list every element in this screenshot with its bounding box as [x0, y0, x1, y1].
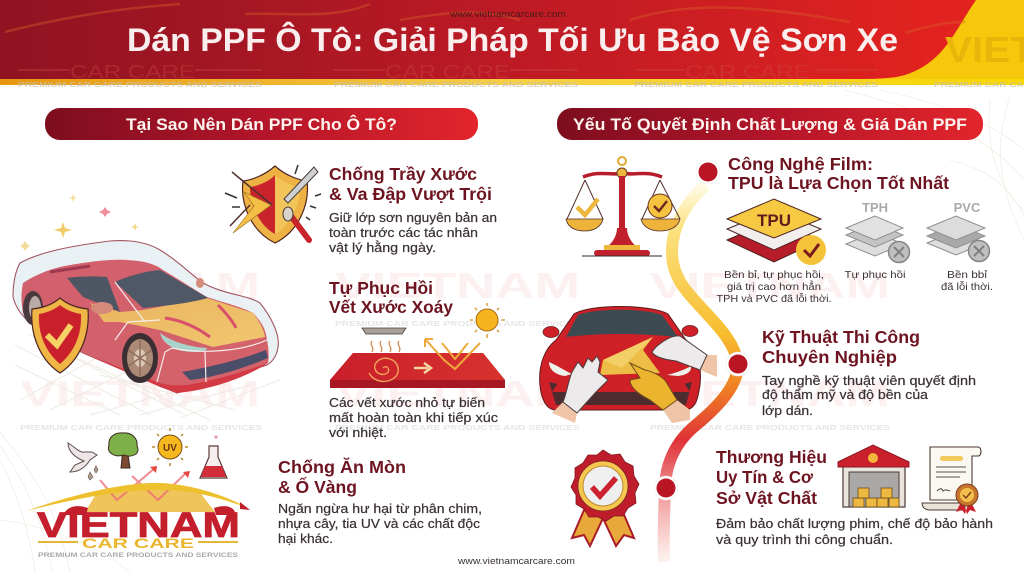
text: brand description	[716, 517, 993, 547]
watermark: car care row: CAR CARE	[70, 62, 195, 82]
heading: left section: Tại Sao Nên Dán PPF Cho Ô Tô?	[126, 115, 397, 134]
text: self healing body	[329, 396, 498, 440]
logo: Vietnam Car Care: CAR CARE	[82, 535, 194, 551]
text: corrosion resistance: hại khác.	[278, 532, 333, 546]
headlights	[549, 362, 572, 376]
yellow glove	[663, 400, 690, 423]
mirror	[91, 302, 113, 314]
logo: Vietnam Car Care	[26, 466, 250, 559]
watermark pattern: PREMIUM CAR CARE PRODUCTS AND SERVICES	[650, 425, 890, 432]
text: installation technique: lớp dán.	[762, 404, 813, 418]
text: corrosion resistance	[278, 456, 482, 546]
timeline path	[664, 185, 738, 562]
text: scratch resistance: Giữ lớp sơn nguyên bản an	[329, 211, 497, 225]
illustration: car under protective film	[13, 241, 280, 420]
icon: PVC film stack: đã lỗi thời.	[941, 280, 993, 293]
premium watermark line	[18, 82, 1024, 89]
text: self healing heading	[329, 278, 453, 317]
title: Dán PPF Ô Tô: Giải Pháp Tối Ưu Bảo Vệ Sơn Xe	[127, 22, 898, 58]
icon: scratch-resistant shield	[225, 165, 321, 243]
text: film technology heading: TPU là Lựa Chọn Tốt Nhất	[728, 173, 949, 193]
text: corrosion resistance: Ngăn ngừa hư hại từ phân chim,	[278, 502, 482, 516]
body lines	[115, 282, 267, 382]
body	[540, 306, 700, 410]
text: TPU description: Bền bỉ, tự phục hồi,	[724, 269, 824, 281]
watermark: corner VIETNAM: VIET	[945, 29, 1024, 70]
icon: TPH film stack: TPH	[862, 200, 888, 215]
text: self healing body: với nhiệt.	[329, 426, 387, 440]
text: installation technique: Tay nghề kỹ thuật viên quyết định	[762, 374, 976, 388]
heading: right section	[557, 108, 983, 140]
film bubble	[13, 241, 278, 393]
text: scratch resistance	[329, 164, 497, 255]
icon: warehouse	[838, 445, 909, 507]
text: corrosion resistance: nhựa cây, tia UV và các chất độc	[278, 517, 480, 531]
text: TPU description: TPH và PVC đã lỗi thời.	[716, 292, 832, 305]
rear wheel	[23, 291, 43, 325]
header banner	[0, 0, 1024, 85]
icons: corrosion agents: UV	[163, 443, 177, 454]
icon: certificate	[922, 447, 981, 514]
text: scratch resistance: & Va Đập Vượt Trội	[329, 184, 492, 204]
premium watermark line: PREMIUM CAR CARE PRODUCTS AND SERVICES	[634, 82, 878, 89]
heading: left section	[45, 108, 478, 140]
mirrors	[543, 326, 559, 338]
top website: www.vietnamcarcare.com	[449, 9, 566, 20]
icon: PVC film stack: PVC	[954, 200, 981, 215]
premium watermark line: PREMIUM CAR CARE PRODUCTS AND SERVICES	[18, 82, 262, 89]
text: TPU description: giá trị cao hơn hẳn	[727, 280, 821, 293]
flask	[200, 446, 227, 478]
watermark pattern: PREMIUM CAR CARE PRODUCTS AND SERVICES	[20, 425, 262, 432]
windshield	[115, 270, 208, 308]
text: TPU description	[716, 269, 832, 305]
text: corrosion resistance: Chống Ăn Mòn	[278, 456, 406, 477]
headlight	[160, 333, 207, 352]
text: self healing body: mất hoàn toàn khi tiếp xúc	[329, 411, 498, 425]
timeline dots	[654, 160, 750, 500]
tree	[121, 448, 130, 468]
heading: right section: Yếu Tố Quyết Định Chất Lượng & Giá Dán PPF	[573, 115, 967, 134]
hood and door highlight	[90, 298, 265, 347]
watermark: car care row: CAR CARE	[385, 62, 510, 82]
premium watermark line: PREMIUM CAR CARE PRODUCTS AND SERVICES	[334, 82, 578, 89]
sparkles	[20, 194, 139, 251]
ground grid	[15, 335, 280, 420]
watermark: car care row	[18, 62, 878, 82]
icon: TPU film stack: TPU	[757, 211, 791, 230]
text: scratch resistance: toàn trước các tác nhân	[329, 226, 478, 240]
dove	[68, 443, 97, 472]
car body	[22, 260, 269, 385]
watermark pattern: PREMIUM CAR CARE PRODUCTS AND SERVICES	[335, 321, 580, 328]
icons: corrosion agents	[68, 428, 227, 480]
text: brand heading: Uy Tín & Cơ	[716, 467, 814, 487]
text: installation technique: Kỹ Thuật Thi Công	[762, 327, 920, 347]
text: scratch resistance: vật lý hằng ngày.	[329, 240, 436, 255]
droppings	[88, 466, 98, 480]
text: film technology heading: Công Nghệ Film:	[728, 154, 873, 174]
logo: Vietnam Car Care: PREMIUM CAR CARE PRODUCTS AND SERVICES	[38, 552, 239, 559]
text: self healing heading: Vết Xước Xoáy	[329, 297, 453, 317]
side window	[67, 276, 120, 312]
watermark pattern: VIETNAM	[335, 265, 580, 306]
icon: award ribbon	[571, 450, 639, 546]
icon: TPH film stack: Tự phục hồi	[844, 269, 906, 281]
text: installation technique: Chuyên Nghiệp	[762, 347, 897, 367]
icon: balance scales	[566, 157, 680, 256]
text: brand description: Đảm bảo chất lượng phim, chế độ bảo hành	[716, 517, 993, 531]
premium watermark line: PREMIUM CAR CA	[934, 82, 1024, 89]
windshield	[566, 310, 678, 337]
watermark pattern: VIETNAM	[335, 373, 580, 414]
footer website: www.vietnamcarcare.com	[457, 556, 575, 567]
shield badge	[32, 298, 88, 373]
logo: Vietnam Car Care: VIETNAM	[37, 506, 240, 545]
icon: TPU film stack	[727, 199, 826, 265]
watermark pattern: VIETNAM	[650, 265, 890, 306]
text: film technology heading	[728, 154, 949, 193]
watermark pattern: PREMIUM CAR CARE PRODUCTS AND SERVICES	[335, 425, 580, 432]
icon: TPH film stack	[844, 200, 910, 281]
watermark: car care row: CAR CARE	[685, 62, 810, 82]
text: installation technique: độ thẩm mỹ và độ bền của	[762, 388, 928, 402]
watermark pattern: VIETNAM	[650, 373, 890, 414]
UV sun	[158, 435, 182, 459]
text: installation technique	[762, 327, 976, 418]
watermark pattern: VIETNAM	[20, 265, 260, 306]
grille	[182, 350, 268, 380]
icon: PVC film stack: Bền bbỉ	[947, 269, 988, 281]
gold film	[600, 337, 660, 375]
illustration: red car and gloved hands	[540, 306, 717, 423]
front wheel	[122, 333, 158, 383]
text: brand heading: Thương Hiệu	[716, 447, 827, 467]
lower grille	[549, 382, 692, 405]
text: self healing body: Các vết xước nhỏ tự biến	[329, 396, 485, 410]
right arm and white glove	[700, 355, 717, 377]
left arm and white glove	[552, 402, 577, 423]
text: scratch resistance: Chống Trầy Xước	[329, 164, 477, 184]
icon: heat recovery slab	[330, 303, 505, 388]
text: brand description: và quy trình thi công chuẩn.	[716, 533, 893, 547]
text: corrosion resistance: & Ố Vàng	[278, 476, 357, 497]
text: brand heading: Sở Vật Chất	[716, 488, 817, 508]
text: self healing heading: Tự Phục Hồi	[329, 278, 433, 298]
underbody shadow	[83, 353, 268, 393]
watermark pattern: VIETNAM	[20, 373, 260, 414]
text: brand heading	[716, 447, 827, 508]
icon: PVC film stack	[927, 200, 993, 293]
watermark pattern	[20, 265, 890, 432]
